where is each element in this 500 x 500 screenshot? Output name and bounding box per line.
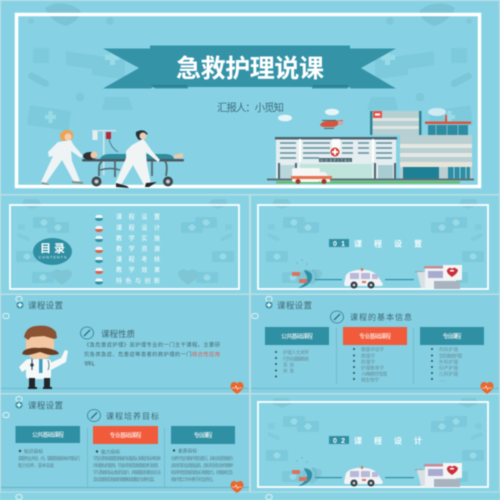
panel: course nature (1, 295, 249, 394)
background pattern, right (428, 398, 484, 484)
patient (83, 152, 183, 160)
panel: title slide (1, 1, 499, 194)
subsection title (80, 327, 135, 339)
section number tag: 02 (333, 438, 345, 445)
course nature paragraph: 学科。 (84, 360, 98, 368)
column: professional foundation (343, 327, 407, 384)
objective column: professional foundation: 学习患者转运过程的监护，并掌握现场救治方法 (93, 469, 162, 476)
objective column: professional: 素质目标 (178, 448, 197, 454)
column: public courses: 行为与健康教育 (283, 356, 310, 362)
objective column: professional foundation: 能力目标 (101, 448, 120, 456)
objective column: professional foundation (93, 426, 162, 483)
subsection title (330, 311, 412, 323)
presenter line: 汇报人：小觅知 (217, 101, 284, 114)
illustration: phone, ambulance, hospital (292, 259, 462, 289)
section number tag: 01 (333, 241, 345, 248)
heart icon (230, 382, 244, 394)
column: public courses: 体育 (283, 368, 294, 374)
ambulance (291, 168, 332, 184)
objective column: professional: 和评判性思维及临床决策能力，并能够在急 (171, 469, 234, 476)
contents list (95, 213, 160, 285)
column: professional courses (420, 327, 484, 382)
course nature paragraph (84, 340, 221, 368)
objective column: public: 知识目标 (24, 448, 43, 455)
column: professional foundation: 病理学 (361, 352, 376, 360)
objective column: professional foundation: 专业基础课程 (110, 432, 142, 440)
ribbon banner (103, 46, 396, 88)
objective column: professional foundation: 急诊急救常见疾病的观察和处理能力培养方案。 (93, 476, 157, 483)
frame (258, 402, 488, 487)
column: professional courses: 急危重症护理 (439, 352, 462, 360)
subsection title: 课程性质 (101, 329, 135, 339)
column: professional courses: 儿科护理 (439, 370, 458, 378)
column: public courses: 英语 (283, 362, 294, 368)
illustration: phone, ambulance, hospital (292, 457, 462, 487)
contents list: 教学实施 (116, 234, 160, 242)
column: public courses: 公共基础课程 (281, 332, 313, 340)
illustration: hospital complex (267, 108, 474, 184)
column: professional courses: 外科护理 (439, 358, 458, 366)
contents list: 课程考核 (116, 256, 160, 264)
panel: basic course info (251, 295, 499, 394)
contents list: 特色与创新 (116, 277, 160, 285)
column: professional foundation: 护理教育学 (361, 364, 384, 372)
column: professional foundation: 专业基础课程 (359, 332, 391, 340)
contents badge: 目录 (40, 242, 65, 255)
section header: 课程设置 (28, 400, 63, 410)
main hospital building: HOSPITAL (320, 158, 350, 162)
stretcher (82, 159, 184, 186)
IV stand (92, 130, 118, 175)
white frame (16, 14, 480, 186)
section header: 课程设置 (28, 300, 63, 310)
objective column: professional: 专业课程 (194, 432, 212, 440)
objective column: professional: 培养学生的救护理念意识，具有关爱患者的 (171, 455, 233, 462)
column: public courses (265, 327, 329, 378)
panel: training objectives (1, 394, 249, 493)
contents list: 教学效果 (116, 266, 160, 274)
heart icon (230, 481, 244, 493)
column: professional foundation: 健康评估学 (361, 346, 384, 353)
column: professional foundation: 药理学 (361, 358, 376, 366)
background medical pattern, left (27, 3, 133, 131)
contents list: 教学资源 (116, 245, 160, 253)
lower right wing (400, 135, 472, 179)
ground (267, 178, 474, 180)
objective column: public: 公共基础课程 (32, 431, 64, 439)
objective column: public: 能力培养、基本技能 (18, 462, 55, 469)
background medical pattern, right (367, 3, 473, 131)
contents badge (33, 238, 72, 265)
frame (10, 205, 239, 289)
frame (258, 205, 488, 289)
course nature paragraph: 究各类急症、危重症等患者的救护理的一门综合性应用 (84, 350, 220, 358)
section heading: 课程设置 (354, 238, 422, 248)
subsection title: 课程培养目标 (106, 411, 159, 421)
section heading: 课程设计 (354, 436, 422, 446)
male nurse (115, 130, 160, 188)
panel: section 02 (251, 394, 499, 492)
objective column: professional (171, 426, 235, 483)
contents list: 课程设计 (116, 224, 160, 232)
column: professional foundation: 人体解剖学生理 (361, 370, 388, 378)
objective column: public (16, 426, 81, 469)
column: professional foundation: 微生物学 (361, 376, 380, 384)
doctor character (19, 326, 68, 389)
column: public courses: 护理人文关怀 (283, 349, 310, 356)
background pattern, right (178, 199, 234, 285)
contents list: 课程设置 (116, 213, 160, 221)
objective column: professional foundation: 外除颤仪的使用，学会对院前急救患者进行处理， (93, 462, 161, 469)
column: professional courses: 内科护理 (439, 346, 458, 353)
section number tag (329, 239, 349, 248)
heart icon (480, 382, 494, 394)
objective column: professional foundation: 学生可熟练掌握急救操作技能及心肺复苏技术和体 (93, 455, 162, 462)
column: professional courses: 妇产护理 (439, 364, 458, 372)
helicopter (320, 120, 343, 129)
panel: contents slide (1, 196, 249, 294)
glass tower (425, 115, 471, 145)
objective column: public: 掌握专业术语、内、掌握患者基本护理技巧 (18, 455, 81, 462)
course nature paragraph: 《急危重症护理》是护理专业的一门主干课程。主要研 (84, 340, 221, 348)
subsection title (88, 410, 159, 422)
clouds (278, 108, 446, 121)
column: professional courses: …… (439, 377, 446, 382)
section header: 课程设置 (277, 300, 312, 310)
panel: section 01 (251, 196, 499, 294)
objective column: professional: 救护理工作中勇于担当责任。 (171, 476, 216, 483)
illustration: nurses with stretcher (41, 130, 184, 188)
upper tower (370, 111, 422, 135)
subsection title: 课程的基本信息 (350, 312, 412, 322)
section number tag (329, 436, 349, 445)
contents badge: CONTENTS (38, 256, 67, 260)
background pattern, right (428, 199, 484, 285)
main hospital building (275, 137, 397, 179)
next slide sliver (0, 492, 500, 500)
column: professional courses: 专业课程 (442, 332, 462, 340)
nurse (41, 130, 83, 185)
title: 急救护理说课 (176, 55, 324, 83)
objective column: professional: 高尚的职业道德品质，良好的团队协作精神 (171, 462, 233, 469)
